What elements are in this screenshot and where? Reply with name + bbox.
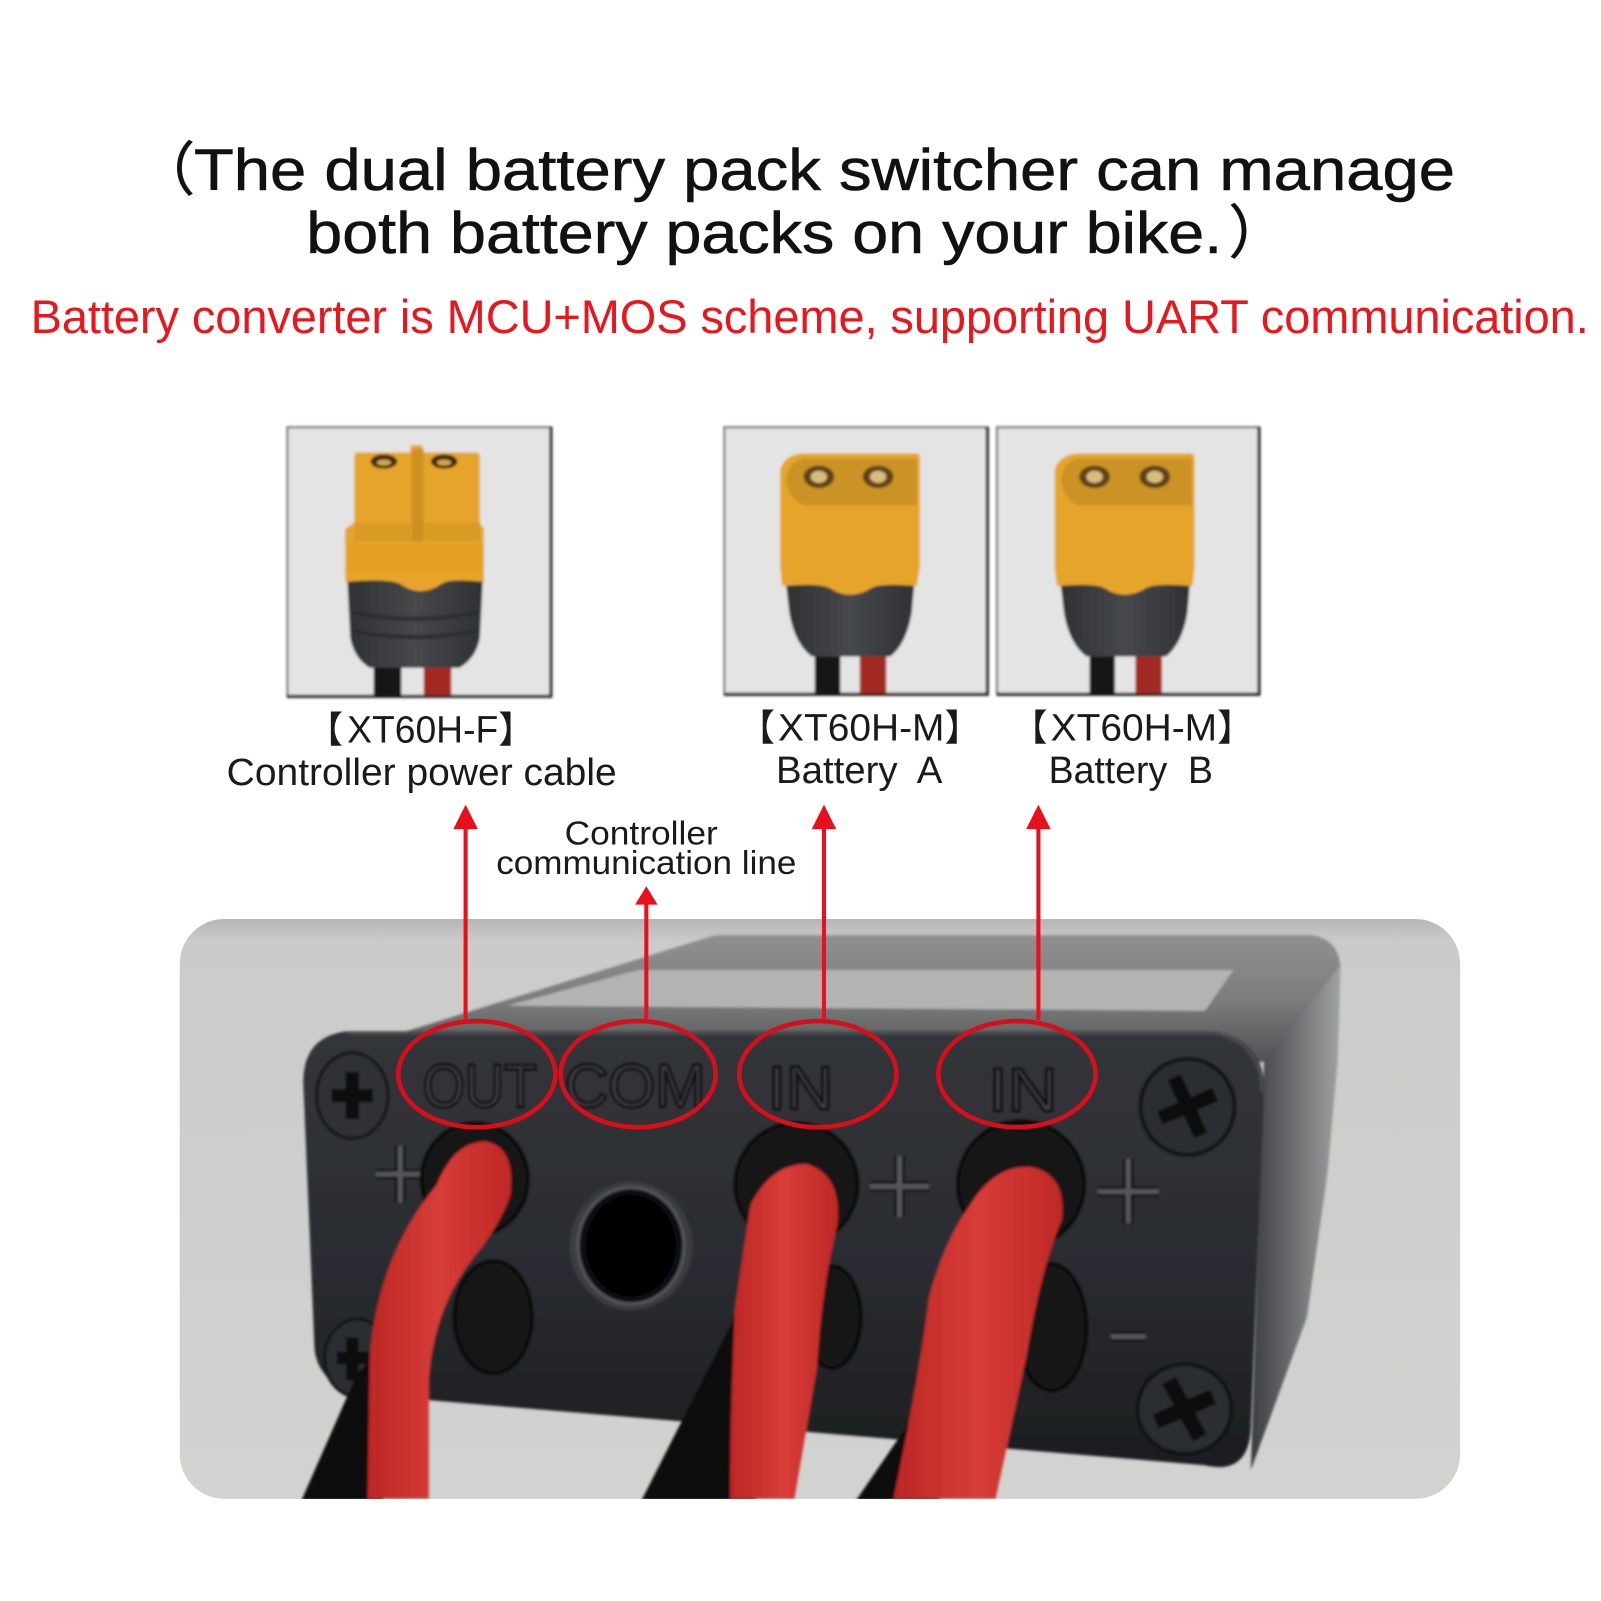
orange housing (345, 445, 484, 591)
arrow: IN to battery B (1026, 805, 1051, 1020)
orange housing (1055, 453, 1195, 595)
embossed port labels: IN (988, 1056, 1058, 1124)
screw bottom left (323, 1317, 373, 1398)
title: （ (137, 138, 195, 203)
cable glands (422, 1121, 1086, 1391)
dark boot (785, 577, 915, 657)
red cable: IN A (730, 1164, 838, 1499)
label: battery B: 】 (1217, 707, 1254, 748)
title: ） (1228, 201, 1287, 266)
embossed port labels (424, 1062, 1054, 1113)
screw top right (1141, 1059, 1234, 1155)
pin sockets (804, 466, 893, 488)
pin sockets (1079, 466, 1170, 488)
label: controller communication line: communication line (496, 845, 796, 882)
title: The dual battery pack switcher can manage (194, 138, 1455, 203)
pin sockets (371, 454, 457, 469)
plate highlight (347, 1033, 1262, 1093)
panel: XT60H-M connector photo, battery A (724, 427, 987, 694)
wires (374, 659, 451, 695)
label: controller communication line (496, 815, 796, 882)
COM port hole (570, 1181, 692, 1310)
label: controller power cable: XT60H-F (347, 709, 498, 751)
label: battery A: Battery A (776, 750, 943, 792)
screw top left (317, 1053, 388, 1138)
dark boot (1060, 577, 1191, 657)
subtitle in red: Battery converter is MCU+MOS scheme, supporting UART communication. (31, 290, 1589, 343)
arrow: COM to communication line (635, 886, 658, 1020)
wires (815, 648, 886, 693)
embossed port labels: OUT (423, 1052, 537, 1120)
embossed polarity highlights (376, 1146, 1159, 1337)
label: battery B: XT60H-M (1051, 707, 1217, 749)
label: battery A: 【 (738, 707, 775, 748)
device top cover (327, 935, 1341, 1062)
label: controller power cable: 【 (306, 709, 343, 750)
arrow: OUT to controller power cable (453, 805, 478, 1020)
label: battery A: XT60H-M (778, 707, 944, 749)
label: battery A: 】 (944, 707, 981, 748)
embossed polarity marks (376, 1146, 1159, 1337)
label: battery B: Battery B (1049, 750, 1213, 792)
red port circles (398, 1021, 1096, 1127)
embossed port labels: IN (768, 1054, 833, 1122)
panel: XT60H-M connector photo, battery B (997, 427, 1259, 694)
label: battery B: 【 (1011, 707, 1048, 748)
screw bottom right (1137, 1364, 1231, 1454)
orange housing (780, 453, 920, 595)
top sticker (507, 970, 1233, 1011)
label: battery B (1011, 707, 1254, 792)
label: controller power cable: 】 (498, 709, 535, 750)
label: controller power cable: Controller power cable (227, 752, 617, 794)
panel: device photo (180, 919, 1460, 1501)
red cable: IN B (893, 1167, 1063, 1499)
black cables (301, 1312, 939, 1501)
wires (1089, 648, 1162, 693)
label: battery A (738, 707, 981, 792)
embossed port labels: COM (565, 1052, 706, 1120)
boot ribs (352, 613, 478, 637)
red cable: OUT (368, 1142, 511, 1499)
title: both battery packs on your bike. (306, 201, 1222, 266)
device right side (1251, 965, 1341, 1470)
dark boot (347, 577, 483, 668)
panel: XT60H-F connector photo (287, 427, 551, 696)
title (137, 138, 1455, 266)
arrow: IN to battery A (812, 805, 836, 1020)
label: controller power cable (227, 709, 617, 794)
label: controller communication line: Controller (565, 815, 718, 852)
front plate (303, 1031, 1264, 1467)
